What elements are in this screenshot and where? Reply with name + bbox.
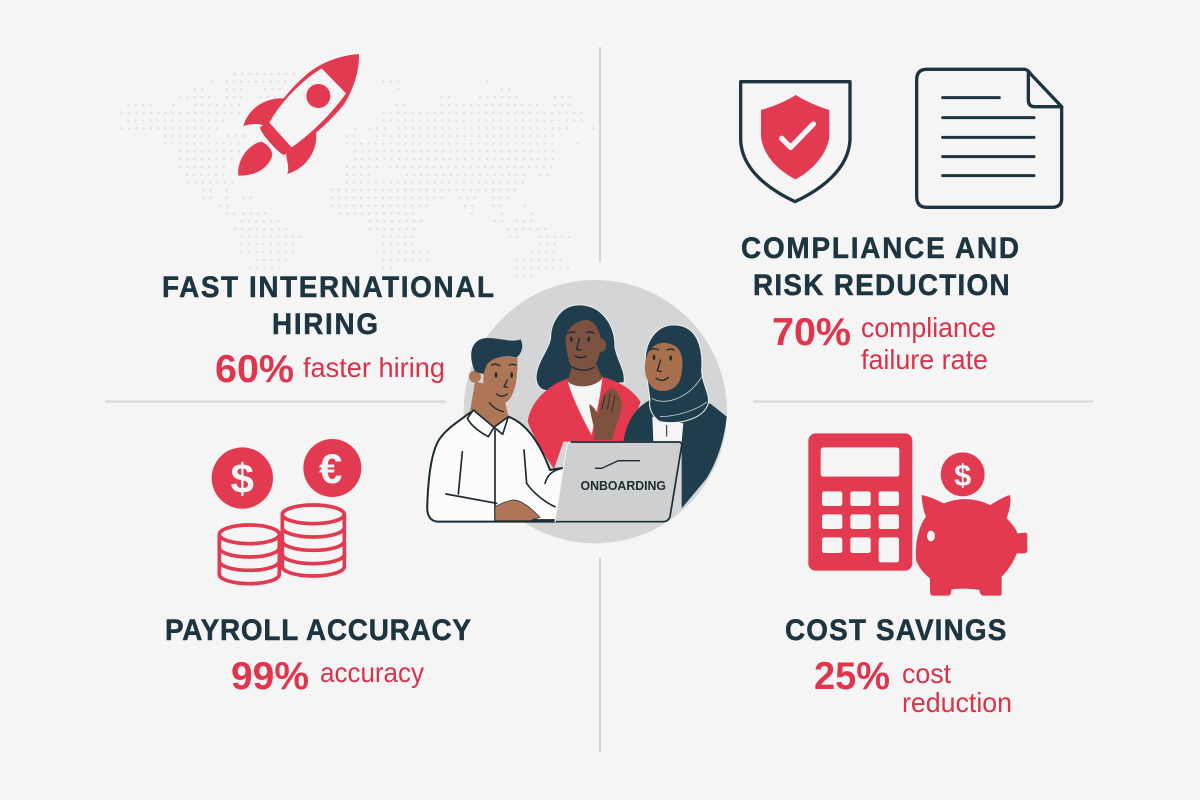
stat: 70% compliance failure rate: compliance [861,312,996,343]
heading: fast international hiring [162,271,494,341]
stat: 99% accuracy: 99% [231,655,309,698]
icon: shield with check [741,82,850,202]
heading: compliance and risk reduction [741,232,1019,302]
heading: fast international hiring: FAST INTERNATIONAL [162,271,494,304]
stat: 70% compliance failure rate [772,311,996,375]
laptop label: ONBOARDING [580,478,666,493]
icon: rocket [238,54,359,176]
icon: coins: $ [231,455,254,502]
woman in hijab [623,325,727,508]
icon: piggy bank with coin [916,452,1027,596]
heading: cost savings: COST SAVINGS [785,614,1006,647]
backdrop circle [464,280,727,543]
heading: payroll accuracy: PAYROLL ACCURACY [165,614,471,647]
icon: calculator [808,433,912,571]
stat: 25% cost reduction: 25% [814,655,890,698]
stat: 99% accuracy [231,655,424,698]
stat: 99% accuracy: accuracy [320,657,424,688]
stat: 60% faster hiring [215,348,445,391]
stat: 25% cost reduction: reduction [902,687,1012,718]
laptop [555,442,682,522]
stat: 70% compliance failure rate: 70% [772,311,851,354]
icon: document [917,69,1062,207]
stat: 60% faster hiring: 60% [215,348,294,391]
man in white shirt [427,338,564,522]
world dot map [122,74,593,276]
heading: compliance and risk reduction: COMPLIANCE AND [741,232,1019,265]
icon: coins: € [319,445,342,492]
icon: coins [212,439,361,584]
stat: 25% cost reduction [814,655,1012,718]
stat: 70% compliance failure rate: failure rate [861,344,988,375]
stat: 25% cost reduction: cost [902,658,951,689]
icon: piggy bank with coin: $ [954,459,971,493]
woman in red cardigan [528,305,641,469]
center illustration: onboarding team [427,280,727,543]
heading: compliance and risk reduction: RISK REDUCTION [753,269,1010,302]
stat: 60% faster hiring: faster hiring [303,352,445,383]
heading: fast international hiring: HIRING [272,308,378,341]
